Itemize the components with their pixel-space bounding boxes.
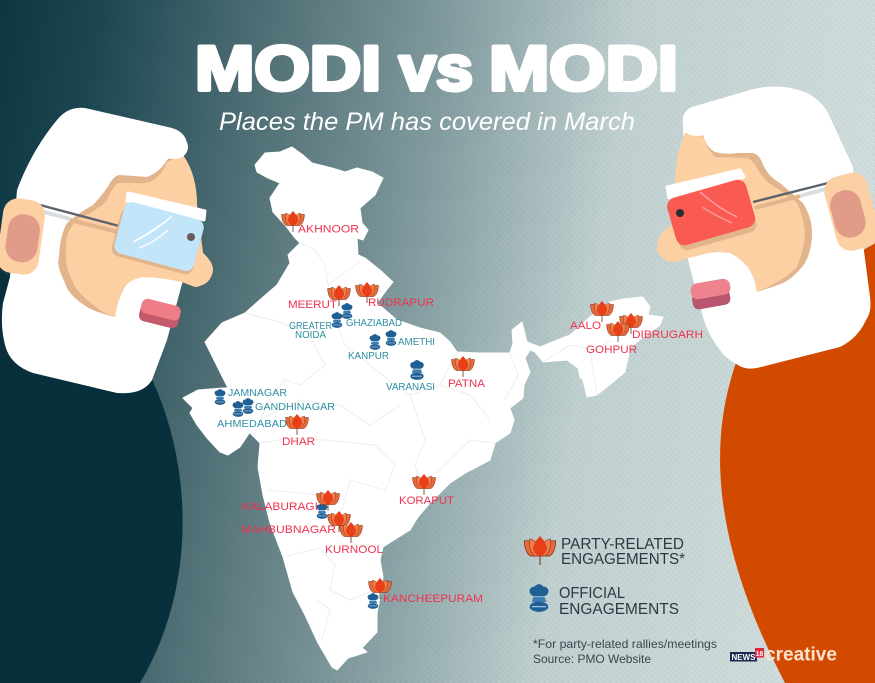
title: vs	[399, 34, 473, 104]
temple shadow	[755, 196, 800, 208]
glasses	[665, 170, 758, 252]
marker: Mahbubnagar: MAHBUBNAGAR	[241, 524, 336, 536]
right character body	[720, 243, 875, 683]
marker: Kurnool: KURNOOL	[325, 544, 383, 556]
title: MODI	[489, 34, 678, 104]
marker: Ahmedabad: AHMEDABAD	[217, 419, 287, 430]
legend: official engagements	[529, 584, 679, 618]
marker: Gandhinagar	[242, 398, 335, 414]
marker: Kancheepuram	[368, 578, 483, 609]
marker: Ghaziabad: GHAZIABAD	[346, 318, 402, 329]
marker: Kanpur	[348, 334, 389, 362]
marker: Greater Noida: NOIDA	[295, 330, 326, 341]
marker: Aalo	[570, 301, 614, 332]
mouth	[689, 278, 733, 310]
title: MODI	[195, 34, 381, 104]
marker: Jamnagar: JAMNAGAR	[228, 388, 287, 399]
left character body	[0, 270, 183, 683]
marker: Meerut: MEERUT	[288, 299, 337, 311]
hair fringe	[683, 105, 712, 136]
face	[58, 155, 213, 317]
hair fringe	[162, 135, 188, 159]
logo: News18 Creative	[730, 644, 837, 666]
glasses	[110, 193, 206, 276]
logo: News18 Creative: 18	[756, 649, 763, 658]
marker: Dibrugarh: DIBRUGARH	[632, 329, 703, 341]
marker: Rudrapur: RUDRAPUR	[368, 297, 434, 309]
glasses temple	[753, 182, 832, 202]
marker: Dibrugarh	[620, 313, 703, 341]
hair and beard	[2, 108, 187, 393]
footnote and source: Source: PMO Website	[533, 652, 651, 666]
legend: official engagements: ENGAGEMENTS	[559, 601, 679, 618]
ear	[0, 196, 47, 277]
marker: Akhnoor: AKHNOOR	[298, 224, 359, 236]
marker: Amethi: AMETHI	[398, 337, 435, 348]
marker: Akhnoor	[282, 211, 359, 236]
temple shadow	[44, 212, 70, 219]
map of India	[183, 147, 663, 670]
logo: News18 Creative: creative	[765, 644, 837, 666]
legend: party-related engagements	[524, 536, 685, 568]
hair and beard	[683, 86, 870, 369]
legend: party-related engagements: PARTY-RELATED	[561, 536, 684, 553]
marker: Greater Noida	[289, 312, 342, 341]
marker: Koraput: KORAPUT	[399, 495, 454, 507]
marker: Greater Noida: GREATER	[289, 321, 332, 332]
glasses temple	[40, 205, 119, 226]
footnote and source: *For party-related rallies/meetings	[533, 637, 717, 651]
face	[657, 133, 812, 292]
left Modi head	[0, 108, 213, 393]
marker: Aalo: AALO	[570, 320, 601, 332]
legend: official engagements: OFFICIAL	[559, 585, 625, 602]
marker: Amethi	[386, 330, 435, 348]
legend	[524, 536, 685, 618]
marker: Gandhinagar: GANDHINAGAR	[255, 402, 335, 413]
footnote and source	[533, 637, 717, 666]
legend: party-related engagements: ENGAGEMENTS*	[561, 551, 685, 568]
subtitle: Places the PM has covered in March	[219, 108, 635, 136]
marker: Dhar	[282, 414, 315, 448]
marker: Kancheepuram: KANCHEEPURAM	[383, 593, 483, 605]
marker: Ahmedabad	[217, 401, 287, 430]
marker: Gohpur: GOHPUR	[586, 344, 637, 356]
marker: Patna: PATNA	[448, 378, 486, 390]
marker: Kurnool	[325, 522, 383, 556]
marker: Dhar: DHAR	[282, 436, 315, 448]
logo: News18 Creative: NEWS	[732, 652, 756, 662]
marker: Rudrapur	[356, 282, 434, 309]
marker: Kanpur: KANPUR	[348, 351, 389, 362]
marker: Kalaburagi: KALABURAGI	[242, 501, 318, 513]
marker: Koraput	[399, 474, 454, 507]
right Modi head	[657, 86, 875, 369]
marker: Patna	[448, 356, 486, 390]
marker: Varanasi	[386, 360, 435, 393]
map markers	[214, 211, 703, 609]
marker: Meerut	[288, 285, 350, 311]
marker: Varanasi: VARANASI	[386, 382, 435, 393]
marker: Mahbubnagar	[241, 511, 350, 536]
title	[195, 34, 678, 104]
marker: Jamnagar	[214, 388, 287, 405]
mouth	[138, 297, 182, 329]
ear	[821, 169, 875, 254]
marker: Gohpur	[586, 321, 637, 356]
marker: Ghaziabad	[342, 303, 402, 329]
marker: Kalaburagi	[242, 490, 340, 519]
